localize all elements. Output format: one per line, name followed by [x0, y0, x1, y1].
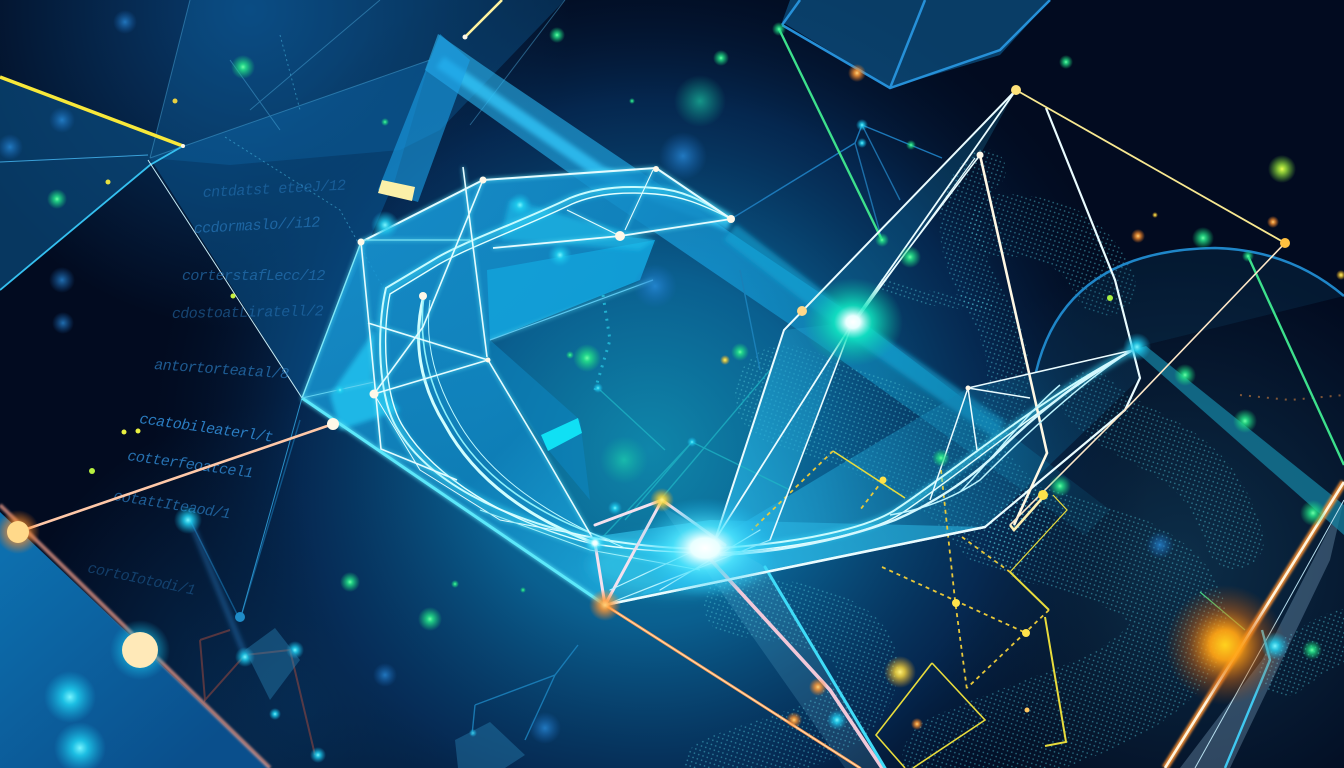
orange edge at lower right: [1165, 482, 1344, 768]
code-like text lines: antortorteatal/8: [154, 357, 290, 383]
code-like text lines: cotattIteaod/1: [112, 488, 231, 523]
node dots: white and cream vertices: [181, 34, 1290, 430]
code-like text lines: corterstafLecc/12: [182, 268, 325, 285]
long peach line: [18, 424, 333, 532]
code-like text lines: [86, 178, 346, 600]
right crystal wireframe: [605, 90, 1285, 605]
panel: right crystal faces: [640, 90, 1344, 768]
code-like text lines: cortoIotodi/1: [86, 560, 196, 600]
code-like text lines: cntdatst eteeJ/12: [202, 178, 346, 202]
light beam across scene: [378, 34, 1110, 535]
glowing crystal tube: [380, 187, 1133, 553]
cream tile on vertical bar: [378, 180, 415, 201]
right teal beam: [1134, 346, 1344, 535]
yellow wireframe shapes: [752, 451, 1067, 768]
thin network lines: [190, 125, 1344, 755]
panel: bottom left corner: [0, 505, 270, 768]
code-like text lines: cotterfeoatcel1: [126, 448, 253, 482]
large blue arc: [1036, 248, 1344, 372]
code-like text lines: ccdormaslo//i12: [193, 214, 321, 238]
upper right hexagon panel: [782, 0, 1050, 88]
central crystal wireframe: [302, 167, 731, 605]
code-like text lines: cdostoatLiratell/2: [172, 303, 324, 323]
bright bottom fan wireframe: [595, 500, 985, 768]
bright left and top yellow lines: [0, 0, 502, 146]
cyan tile: [541, 418, 582, 451]
left cyan lines: [0, 146, 302, 620]
panel: central crystal body: [302, 168, 985, 605]
dark network cluster at bottom: [245, 628, 525, 768]
panel: upper left translucent planes: [0, 0, 565, 398]
green lines: [779, 29, 1344, 630]
dotted ribbons: [715, 170, 1344, 768]
code-like text lines: ccatobileaterl/t: [138, 411, 274, 447]
node dots: green lights: [47, 22, 1326, 660]
